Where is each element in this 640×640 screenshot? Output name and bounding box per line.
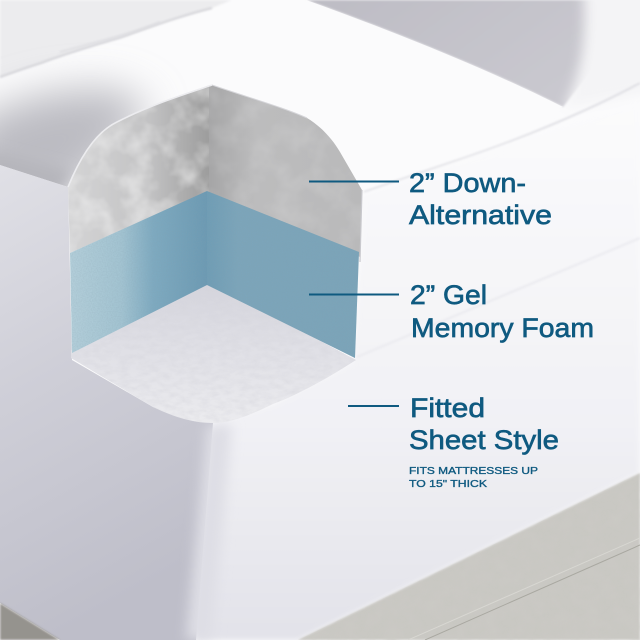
- leader line: [309, 180, 399, 182]
- heading: Fitted: [410, 393, 485, 423]
- shadow area behind the corner, top right: [300, 0, 640, 130]
- soft corner transition: [186, 425, 232, 640]
- note: FITS MATTRESSES UP: [409, 465, 538, 477]
- heading: Memory Foam: [411, 313, 594, 343]
- bed base: dark corner, left: [0, 603, 60, 640]
- layer: gel memory foam: [65, 185, 362, 360]
- upper quilted panel: [0, 0, 232, 77]
- layer: down-alternative fill: [60, 80, 364, 260]
- heading: Sheet Style: [409, 425, 559, 455]
- heading: Alternative: [409, 200, 552, 230]
- heading: 2” Gel: [410, 280, 487, 310]
- heading: 2” Down-: [409, 168, 526, 198]
- label: fitted sheet style: [348, 393, 559, 490]
- label: 2 inch down-alternative: [309, 168, 552, 230]
- note: TO 15" THICK: [409, 478, 487, 490]
- topper edge fold, right side: [357, 238, 640, 357]
- label: 2 inch gel memory foam: [309, 280, 594, 343]
- quilting creases: [0, 8, 212, 77]
- background: white mattress topper: [0, 0, 230, 187]
- bed base: grey fabric, right: [298, 473, 640, 640]
- side panel: right face of the mattress: [196, 100, 640, 640]
- pillow on the top right: [563, 0, 640, 109]
- leader line: [309, 294, 399, 296]
- shaded top surface left of the cutaway: [0, 89, 150, 200]
- cut edges: [68, 85, 212, 187]
- leader line: [348, 405, 399, 407]
- side panel: left face of the mattress: [0, 165, 213, 640]
- cutaway: [60, 80, 364, 426]
- topper seam, right side: [364, 83, 640, 192]
- layer: quilted base: [70, 278, 358, 426]
